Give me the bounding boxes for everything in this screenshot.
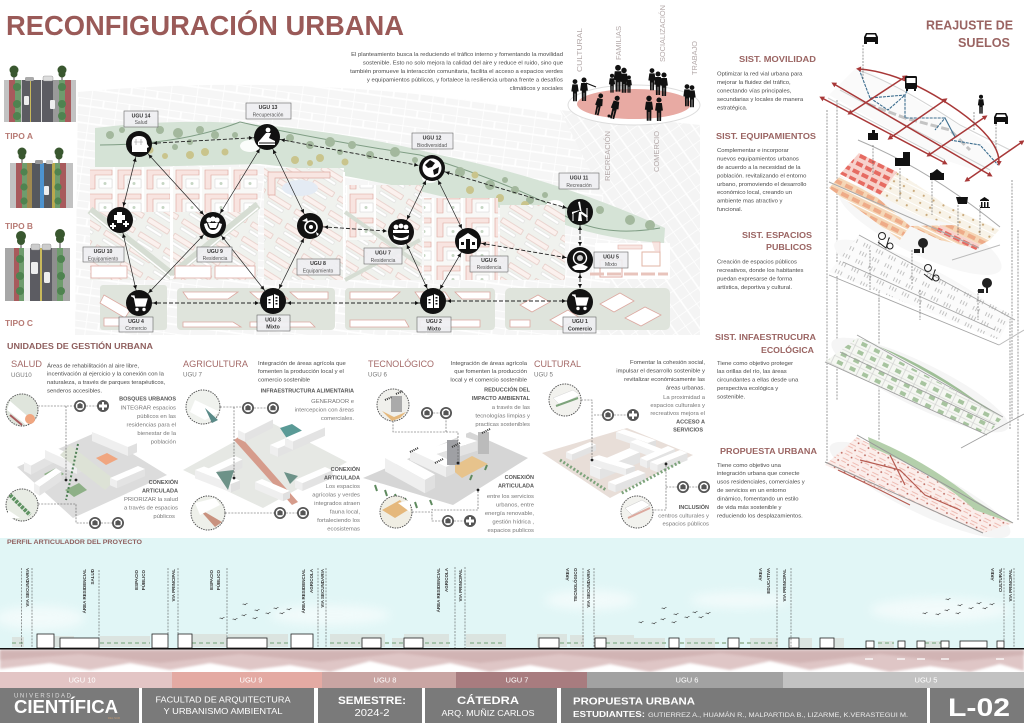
panel: propuesta urbana text: Tiene como objetivo una	[717, 463, 782, 469]
social labels: TRABAJO	[690, 41, 699, 75]
ugu node 11	[567, 199, 593, 225]
agricultura description: comercio sostenible	[258, 378, 311, 384]
social diagram	[568, 5, 700, 181]
salud description: Áreas de rehabilitación al aire libre,	[47, 362, 139, 370]
agricultura isometric block	[183, 416, 347, 508]
tecnologico callouts	[472, 386, 535, 534]
agricultura description: fomenten la producción local y el	[258, 369, 344, 375]
tecnologico callouts: IMPACTO AMBIENTAL	[472, 396, 531, 402]
label ugu 3	[257, 315, 290, 331]
social labels: FAMILIAS	[614, 26, 623, 60]
right column heading: SUELOS	[958, 35, 1010, 50]
panel: sist espacios publicos text: puedan expresarse de forma	[717, 276, 793, 282]
tecnologico callouts: gestión hídrica ,	[492, 520, 534, 526]
agricultura callouts: comerciales.	[321, 416, 354, 422]
profile vertical labels: CULTURAL	[998, 568, 1003, 592]
label ugu 6: UGU 6	[481, 258, 497, 264]
panel: sist equipamientos text: urbano, promoviendo el desarrollo	[717, 182, 807, 188]
university logo: UNIVERSIDAD	[14, 694, 72, 700]
ugu node 1	[567, 289, 593, 315]
label tipo B: TIPO B	[5, 222, 33, 231]
profile vertical labels: VIA PRINCIPAL	[458, 569, 463, 602]
cultural callouts: centros culturales y	[658, 514, 709, 520]
street type B	[10, 148, 73, 208]
tecnologico callouts: a través de las	[492, 405, 530, 411]
cultural callouts: espacios públicos	[662, 522, 709, 528]
public space icons	[878, 232, 992, 293]
social platform ellipse	[568, 85, 700, 125]
label ugu 9: Residencia	[203, 256, 228, 262]
social labels: RECREACIÓN	[603, 131, 612, 181]
ugu node 5	[567, 247, 593, 273]
right column heading	[926, 18, 1013, 50]
label ugu 8: Equipamiento	[303, 268, 334, 274]
salud description: senderos accesibles.	[47, 388, 102, 394]
agricultura callouts	[261, 388, 360, 532]
tecnologico callouts: ARTICULADA	[498, 484, 534, 490]
panel: sist movilidad text: estratégica.	[717, 106, 748, 112]
agricultura callouts: integrados atraen	[314, 501, 360, 507]
label ugu 4	[119, 317, 153, 332]
profile dashed verticals	[22, 567, 1014, 648]
label ugu 8	[297, 259, 340, 275]
agricultura callouts: GENERADOR e	[311, 399, 355, 405]
salud callouts: PRIORIZAR la salud	[124, 497, 178, 503]
tecnologico description	[450, 361, 528, 384]
label ugu 11	[559, 173, 599, 189]
panel: sist espacios publicos text: SIST. ESPACIOS	[742, 230, 812, 240]
agricultura callouts: INFRAESTRUCTURA ALIMENTARIA	[261, 388, 354, 394]
profile vertical labels: VIA SECUNDARIA	[586, 568, 591, 608]
label ugu 10: Equipamiento	[88, 256, 119, 262]
panel: propuesta urbana text: de vida más sostenible y	[717, 505, 782, 511]
label ugu 1: UGU 1	[572, 319, 588, 325]
panel: sist espacios publicos text: PUBLICOS	[766, 242, 812, 252]
ugu node 13	[254, 124, 280, 150]
agricultura callouts: Los espacios	[326, 484, 360, 490]
sky background	[0, 538, 1024, 650]
panel: salud	[6, 359, 178, 529]
cultural description: impulsar el desarrollo sostenible y	[616, 368, 705, 374]
profile vertical labels: VIA PRINCIPAL	[171, 569, 176, 602]
panel: propuesta urbana text: de servicios en un entorno	[717, 488, 787, 494]
ugu node 4	[126, 290, 152, 316]
salud callouts: BOSQUES URBANOS	[119, 396, 176, 402]
university logo: CIENTÍFICA	[14, 696, 118, 717]
agricultura heading	[183, 359, 249, 378]
label ugu 11: Recreación	[566, 183, 592, 189]
social labels: SOCIALIZACIÓN	[658, 5, 667, 62]
salud description	[47, 362, 166, 394]
cultural callouts	[650, 395, 709, 528]
profile vertical labels: ÁREA	[989, 567, 995, 581]
layer: equipamientos	[829, 130, 1011, 291]
salud callouts: residencias para el	[127, 422, 176, 428]
salud detail circles and connectors	[6, 394, 124, 529]
salud callouts: a través de espacios	[124, 506, 178, 512]
panel: propuesta urbana text: dinámico, fomentando un estilo	[717, 496, 799, 502]
layer: propuesta urbana	[820, 426, 1020, 554]
panel: propuesta urbana text: reduciendo los desplazamientos.	[717, 514, 803, 520]
label ugu 12: Biodiversidad	[417, 143, 447, 149]
panel: sist equipamientos text: población. revitalizando el entorno	[717, 174, 807, 180]
label ugu 12: UGU 12	[423, 136, 441, 142]
panel: sist movilidad text: Optimizar la red vial urbana para	[717, 72, 803, 78]
profile vertical labels: VIA SECUNDARIA	[320, 568, 325, 608]
ugu node 9	[200, 212, 226, 238]
label ugu 13: Recuperación	[253, 112, 284, 118]
label ugu 7: Residencia	[371, 258, 396, 264]
birds	[219, 598, 995, 624]
layer: espacios publicos	[826, 225, 1024, 345]
profile vertical labels: ÁREA	[564, 567, 570, 581]
tecnologico callouts: energía renovable,	[485, 511, 534, 517]
panel: sist equipamientos text: Complementar e incorporar	[717, 148, 789, 154]
panel: section profile	[0, 538, 1024, 672]
connection arrows	[120, 137, 580, 303]
panel: agricultura	[183, 359, 360, 532]
panel: sist infraestructura ecologica text	[715, 332, 816, 400]
tecnologico callouts: urbanos, entre	[496, 502, 535, 508]
agricultura heading: UGU 7	[183, 372, 202, 378]
mobility icons	[863, 33, 1008, 150]
cultural heading	[534, 359, 582, 378]
panel: sist movilidad text: mejorar la fluidez del tráfico,	[717, 80, 791, 86]
label tipo C: TIPO C	[5, 319, 33, 328]
panel: sist infraestructura ecologica text: perspectiva ecológica y	[717, 386, 778, 392]
salud isometric block	[17, 428, 167, 518]
section buildings	[37, 634, 1004, 648]
label ugu 9: UGU 9	[207, 249, 223, 255]
cultural description: revitalizar económicamente las	[624, 377, 705, 383]
intro paragraph: y equipamientos públicos, y fortalece la resiliencia urbana frente a desafíos	[367, 78, 563, 84]
profile vertical labels: EDUCATIVA	[766, 567, 771, 594]
intro paragraph: sostenible. Esto no solo mejora la calidad del aire y reduce el ruido, sino que	[363, 60, 564, 66]
salud callouts: bienestar de la	[137, 431, 177, 437]
cultural callouts: espacios culturales y	[650, 403, 705, 409]
tecnologico callouts: entre los servicios	[487, 494, 534, 500]
street type A	[4, 66, 76, 122]
tecnologico callouts: CONEXIÓN	[505, 473, 534, 481]
cultural heading: UGU 5	[534, 372, 553, 378]
surrounding city fabric	[75, 85, 700, 335]
panel: sist espacios publicos text: recreativos, donde los habitantes	[717, 268, 804, 274]
tecnologico callouts: REDUCCIÓN DEL	[484, 386, 531, 394]
catedra: ARQ. MUÑIZ CARLOS	[442, 709, 534, 718]
salud callouts: CONEXIÓN	[149, 478, 178, 486]
panel: propuesta urbana text: usos residenciales, comerciales y	[717, 480, 805, 486]
label ugu 13	[246, 103, 291, 119]
lower mixed use band	[100, 285, 670, 330]
profile vertical labels: VIA SECUNDARIA	[25, 567, 30, 607]
footer	[0, 688, 1024, 723]
label ugu 14	[124, 111, 158, 127]
cultural callouts: SERVICIOS	[673, 428, 703, 434]
label ugu 10: UGU 10	[94, 249, 112, 255]
exploded axonometric layers	[820, 33, 1024, 554]
profile vertical labels: ÁREA	[757, 567, 763, 581]
cultural description	[616, 360, 705, 392]
faculty: Y URBANISMO AMBIENTAL	[164, 707, 283, 716]
catedra	[442, 694, 534, 718]
ugu colour bar: UGU 10	[68, 676, 96, 684]
tecnologico detail circles and connectors	[377, 389, 479, 528]
profile vertical labels: TECNOLÓGICO	[571, 568, 578, 602]
panel: sist equipamientos text	[716, 131, 816, 213]
cultural description: áreas urbanas.	[666, 386, 705, 392]
panel: sist equipamientos text: de acuerdo a la necesidad de la	[717, 165, 801, 171]
tecnologico description: Integración de áreas agrícola	[451, 361, 528, 367]
cultural callouts: INCLUSIÓN	[679, 503, 709, 511]
label ugu 9	[197, 247, 232, 262]
profile vertical labels: ÁREA RESIDENCIAL	[300, 569, 306, 613]
street sections	[4, 66, 76, 328]
footer band	[0, 688, 1024, 723]
label ugu 7	[364, 248, 402, 264]
panel: sist equipamientos text: funcional.	[717, 207, 743, 213]
panel: sist equipamientos text: nuevos equipamientos urbanos	[717, 156, 799, 162]
label ugu 3: Mixto	[266, 324, 280, 330]
project and students	[573, 696, 908, 719]
catedra: CÁTEDRA	[457, 694, 519, 707]
agricultura description: Integración de áreas agrícola que	[258, 361, 346, 367]
agricultura detail circles and connectors	[186, 390, 309, 530]
social labels: CULTURAL	[575, 28, 584, 72]
tecnologico isometric block	[363, 429, 528, 508]
profile vertical labels: VIA PRINCIPAL	[782, 569, 787, 602]
label ugu 11: UGU 11	[570, 176, 588, 182]
residential blocks	[90, 167, 670, 280]
right column heading: REAJUSTE DE	[926, 18, 1013, 32]
semester: SEMESTRE:	[338, 695, 406, 707]
ugu node 12	[419, 155, 445, 181]
label ugu 12	[412, 133, 453, 149]
profile vertical labels: ESPACIO	[209, 570, 214, 590]
project and students: PROPUESTA URBANA	[573, 696, 695, 708]
panel: sist infraestructura ecologica text: ECOLÓGICA	[761, 344, 814, 355]
tecnologico heading: UGU 6	[368, 372, 387, 378]
salud callouts: población	[151, 440, 176, 446]
panel: tecnologico	[363, 359, 535, 534]
ugu node 7	[388, 219, 414, 245]
salud callouts: públicos	[153, 514, 175, 520]
label ugu 13: UGU 13	[259, 105, 277, 111]
title: RECONFIGURACIÓN URBANA	[6, 10, 404, 41]
tecnologico callouts: practicas sostenibles	[475, 422, 530, 428]
ugu colour bar: UGU 6	[676, 676, 698, 684]
label ugu 4: UGU 4	[128, 319, 144, 325]
panel: sist espacios publicos text	[717, 230, 812, 291]
street type C	[5, 229, 70, 301]
panel: sist infraestructura ecologica text: SIST. INFAESTRUCURA	[715, 332, 816, 342]
park green band	[95, 122, 665, 243]
tecnologico callouts: tecnologías limpias y	[475, 414, 530, 420]
salud heading: UGU10	[11, 372, 32, 379]
ugu node 14	[126, 131, 152, 157]
label ugu 2: UGU 2	[426, 319, 442, 325]
label ugu 2	[417, 317, 451, 332]
faculty	[156, 696, 291, 716]
profile vertical labels: SALUD	[90, 568, 95, 584]
clouds	[0, 590, 1010, 630]
intro paragraph: también promueve la interacción comunitaria, facilita el acceso a espacios verdes	[350, 69, 563, 75]
cultural description: Fomentar la cohesión social,	[630, 360, 705, 366]
label ugu 7: UGU 7	[375, 250, 391, 256]
label ugu 5	[594, 252, 628, 268]
salud callouts	[119, 396, 178, 520]
profile vertical labels: PÚBLICO	[215, 570, 221, 590]
people silhouettes	[571, 65, 696, 121]
ugu node 2	[420, 288, 446, 314]
profile vertical labels: ÁREA RESIDENCIAL	[81, 569, 87, 613]
panel: sist equipamientos text: ambiente mas atractivo y	[717, 198, 783, 204]
ugu colour bar	[0, 672, 1024, 688]
profile vertical labels	[25, 567, 1013, 613]
label ugu 2: Mixto	[427, 326, 441, 332]
ugu colour bar: UGU 5	[915, 676, 937, 684]
agricultura callouts: fauna local,	[330, 510, 360, 516]
panel: propuesta urbana text	[717, 446, 817, 520]
ground line	[0, 648, 1024, 650]
salud callouts: públicos en las	[137, 414, 176, 420]
label ugu 1: Comercio	[568, 326, 592, 332]
panel: sist infraestructura ecologica text: Tiene como objetivo proteger	[717, 361, 793, 367]
ugu labels	[83, 103, 628, 333]
project and students: GUTIERREZ A., HUAMÁN R., MALPARTIDA B., LIZARME, K.VERASTEGUI M.	[648, 710, 908, 719]
panel: cultural	[534, 359, 710, 528]
tecnologico heading: TECNOLÓGICO	[368, 359, 434, 370]
profile vertical labels: AGRICOLA	[309, 568, 314, 593]
facility icons	[868, 130, 990, 208]
cultural heading: CULTURAL	[534, 359, 582, 370]
cultural isometric block	[542, 428, 693, 498]
panel: sist movilidad text: SIST. MOVILIDAD	[739, 54, 816, 64]
background trees and volumes	[12, 634, 941, 648]
panel: sist espacios publicos text: artística, deportiva y cultural.	[717, 285, 792, 291]
profile vertical labels: PÚBLICO	[140, 570, 146, 590]
tecnologico description: que fomenten la producción	[454, 369, 527, 375]
label ugu 10	[83, 247, 124, 262]
ugu node 8	[297, 213, 323, 239]
tecnologico heading	[368, 359, 434, 378]
university logo: DEL SUR	[108, 716, 120, 720]
salud heading: SALUD	[11, 359, 42, 370]
salud callouts: ARTICULADA	[142, 488, 178, 494]
ugu node 6	[455, 228, 481, 254]
agricultura callouts: CONEXIÓN	[331, 465, 360, 473]
panel: propuesta urbana text: PROPUESTA URBANA	[720, 446, 817, 456]
label ugu 6: Residencia	[477, 265, 502, 271]
cultural detail circles and connectors	[549, 384, 710, 528]
panel: sist movilidad text: conectando vías principales,	[717, 88, 792, 94]
label ugu 4: Comercio	[125, 326, 147, 332]
ugu node 10	[107, 207, 133, 233]
faculty: FACULTAD DE ARQUITECTURA	[156, 696, 291, 704]
social labels: COMERCIO	[652, 131, 661, 172]
urban master plan map	[75, 85, 700, 335]
panel: sist movilidad text: secundarias y locales de manera	[717, 97, 804, 103]
ugu node 3	[260, 288, 286, 314]
profile heading: PERFIL ARTICULADOR DEL PROYECTO	[7, 539, 142, 546]
panel: sist movilidad text	[717, 54, 816, 112]
layer connector lines	[827, 100, 1018, 520]
panel: sist infraestructura ecologica text: sostenible.	[717, 394, 746, 400]
salud callouts: INTEGRAR espacios	[121, 406, 176, 412]
semester: 2024-2	[354, 708, 390, 719]
label ugu 3: UGU 3	[265, 318, 281, 324]
salud description: incentivación al ejercicio y la conexión con la	[47, 372, 165, 378]
profile vertical labels: ÁREA RESIDENCIAL	[435, 568, 441, 612]
profile vertical labels: VIA PRINCIPAL	[1008, 569, 1013, 602]
label ugu 5: UGU 5	[603, 254, 619, 260]
intro paragraph	[350, 52, 564, 92]
label ugu 14: Salud	[135, 120, 148, 126]
agricultura callouts: intercepcion con áreas	[295, 408, 354, 414]
social labels	[575, 5, 699, 181]
salud heading	[11, 359, 42, 379]
layer: infraestructura ecologica	[822, 322, 1024, 448]
label ugu 5: Mixto	[605, 262, 617, 268]
salud description: naturaleza, a través de parques terapéuticos,	[47, 380, 166, 386]
watercolor ground	[0, 649, 1024, 672]
layer: movilidad	[822, 65, 1022, 180]
agricultura description	[258, 361, 346, 384]
label ugu 6	[470, 256, 508, 272]
project and students: ESTUDIANTES:	[573, 709, 645, 719]
agricultura callouts: agrícolas y verdes	[312, 492, 360, 498]
tecnologico callouts: espacios publicos	[488, 528, 534, 534]
cultural callouts: La proximidad a	[663, 395, 706, 401]
ugu colour bar: UGU 9	[240, 676, 262, 684]
cultural callouts: recreativos mejora el	[650, 411, 705, 417]
panel: sist equipamientos text: económico local, creando un	[717, 190, 792, 196]
agricultura heading: AGRICULTURA	[183, 359, 249, 370]
agricultura callouts: ARTICULADA	[324, 476, 360, 482]
label tipo A: TIPO A	[5, 132, 33, 141]
panel: sist equipamientos text: SIST. EQUIPAMIENTOS	[716, 131, 816, 141]
panel: sist infraestructura ecologica text: circundantes a ellas desde una	[717, 378, 799, 384]
panel: sist espacios publicos text: Creación de espacios públicos	[717, 260, 797, 266]
panel: propuesta urbana text: integración urbana que conecte	[717, 471, 800, 477]
label ugu 1	[563, 317, 596, 333]
cultural callouts: ACCESO A	[676, 420, 705, 426]
agricultura callouts: fortaleciendo los	[317, 518, 360, 524]
profile vertical labels: AGRICOLA	[444, 567, 449, 592]
intro paragraph: El planteamiento busca la reduciendo el tráfico interno y fomentando la movilidad	[351, 52, 563, 58]
ugu colour bar: UGU 8	[374, 676, 396, 684]
intro paragraph: climáticos y sociales	[510, 86, 563, 92]
sheet number: L-02	[948, 694, 1010, 722]
profile vertical labels: ESPACIO	[134, 570, 139, 590]
tecnologico description: local y el comercio sostenible	[450, 378, 528, 384]
ugu colour bar: UGU 7	[506, 676, 528, 684]
urban management section heading: UNIDADES DE GESTIÓN URBANA	[7, 340, 153, 351]
panel: sist infraestructura ecologica text: las orillas del río, las áreas	[717, 369, 787, 375]
semester	[338, 695, 406, 719]
label ugu 14: UGU 14	[132, 114, 150, 120]
agricultura callouts: ecosistemas	[327, 526, 360, 532]
label ugu 8: UGU 8	[310, 261, 326, 267]
